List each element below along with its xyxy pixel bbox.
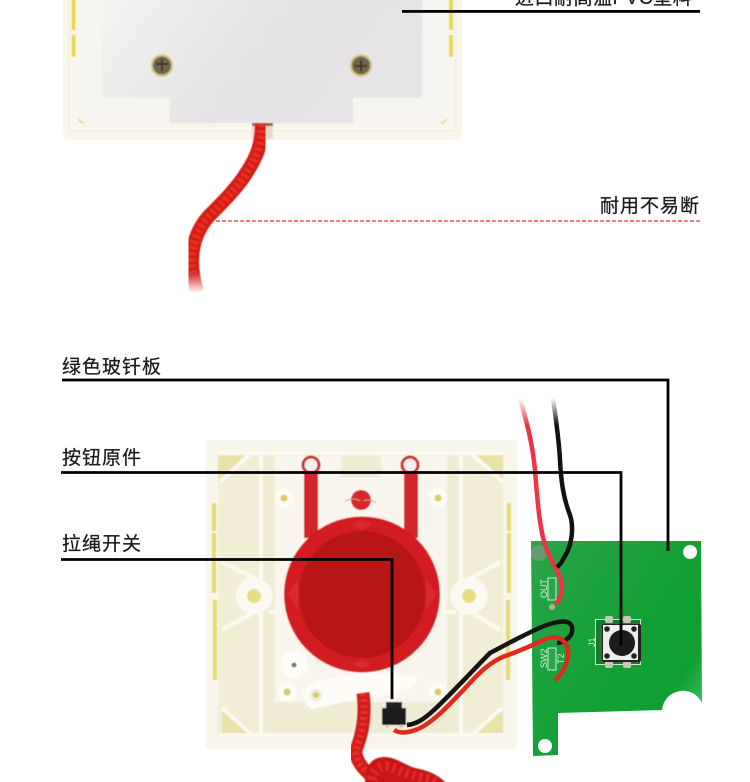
silk: OUT bbox=[539, 578, 556, 610]
screw boss: large right bbox=[450, 578, 488, 614]
red LED bbox=[345, 490, 376, 510]
rope: bottom bbox=[356, 693, 447, 782]
rope: top bbox=[192, 124, 262, 292]
silk: SW2: SW2 bbox=[539, 648, 549, 668]
callout: pull-cord switch bbox=[61, 533, 392, 699]
plate shell bbox=[206, 440, 517, 750]
callout: green fibreglass board bbox=[62, 356, 668, 551]
silk: SW2: T2 bbox=[556, 653, 566, 664]
dashed leader: rope bbox=[216, 220, 701, 222]
inner cover bbox=[79, 0, 446, 123]
pull lever bbox=[302, 673, 417, 709]
silk: OUT: OUT bbox=[539, 578, 549, 598]
photo: top plate bottom edge bbox=[63, 0, 462, 140]
silk: SW2 bbox=[539, 648, 566, 670]
red arms bbox=[303, 457, 418, 538]
leader line bbox=[62, 380, 668, 551]
rope slot bbox=[252, 123, 273, 139]
label: 绿色玻钎板: 绿色玻钎板 bbox=[62, 356, 162, 378]
leader line: PVC bbox=[402, 10, 700, 13]
screw bosses: small bbox=[274, 488, 448, 702]
corner shading bbox=[218, 453, 503, 735]
screw boss: large left bbox=[236, 578, 272, 614]
PCB board bbox=[531, 541, 702, 756]
yellow strips bbox=[72, 0, 453, 57]
wires: switch to board bbox=[394, 622, 572, 733]
leader line bbox=[61, 472, 621, 646]
ribs bbox=[218, 453, 503, 735]
mounting holes bbox=[683, 545, 697, 559]
micro switch bbox=[382, 702, 406, 728]
leader line bbox=[61, 560, 392, 699]
plate outer shell bbox=[63, 0, 462, 140]
screw: left bbox=[150, 54, 174, 77]
yellow edge strips bbox=[212, 503, 511, 680]
silk: J1: J1 bbox=[587, 637, 597, 647]
red button disc bbox=[284, 516, 440, 672]
label: 按钮原件: 按钮原件 bbox=[62, 447, 142, 469]
back of plate bbox=[206, 440, 517, 750]
centre floor bbox=[263, 453, 462, 735]
screw: right bbox=[350, 54, 372, 77]
label: 拉绳开关: 拉绳开关 bbox=[62, 533, 142, 555]
callout: button component bbox=[61, 447, 621, 646]
wires above board bbox=[520, 398, 572, 604]
push button bbox=[596, 616, 641, 668]
label: 耐用不易断: 耐用不易断 bbox=[600, 195, 700, 217]
